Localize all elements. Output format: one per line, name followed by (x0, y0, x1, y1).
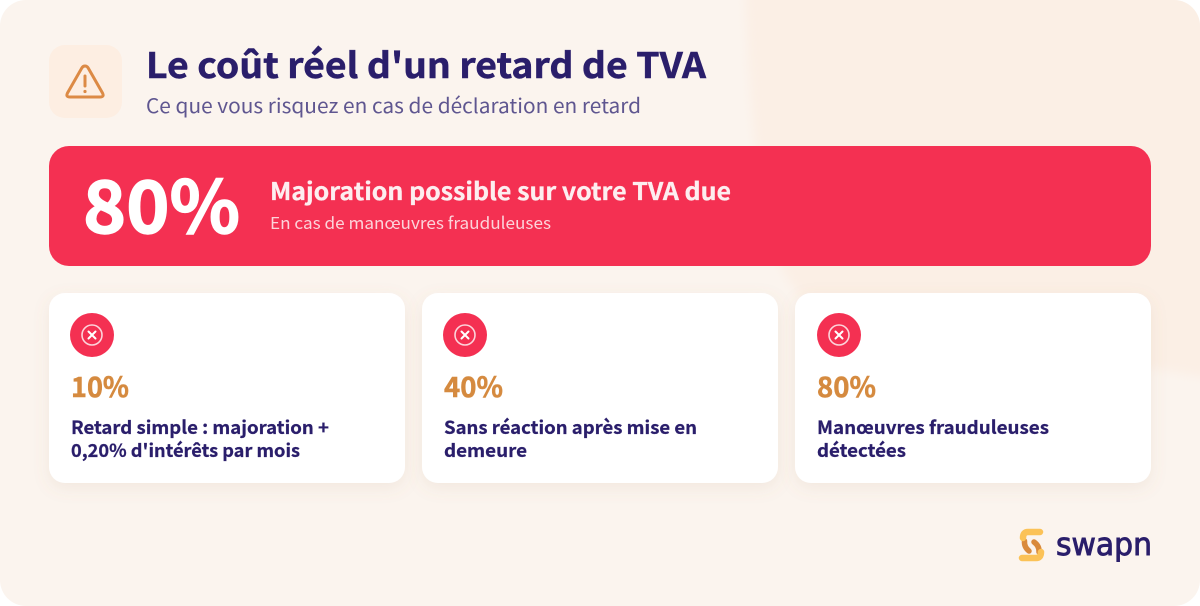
big number: 80% (83, 149, 240, 254)
percentage: 80% (817, 366, 876, 406)
icon: cross in circle (443, 313, 487, 357)
banner heading: Majoration possible sur votre TVA due (270, 172, 731, 207)
icon: cross in circle (70, 313, 114, 357)
description: demeure (444, 437, 527, 463)
icon: logo mark (1022, 532, 1041, 558)
icon: warning triangle (49, 45, 122, 118)
description: 0,20% d'intérêts par mois (71, 437, 300, 463)
panel: main red banner (49, 146, 1151, 266)
description: Retard simple : majoration + (71, 414, 329, 440)
panel: card 10% (49, 293, 405, 483)
description: Sans réaction après mise en (444, 414, 697, 440)
banner subtext: En cas de manœuvres frauduleuses (270, 210, 551, 234)
wordmark: swapn (1056, 527, 1152, 563)
logo: swapn (1022, 527, 1152, 563)
panel: card 80% (795, 293, 1151, 483)
percentage: 10% (71, 366, 129, 406)
subtitle: Ce que vous risquez en cas de déclaration en retard (146, 90, 641, 119)
description: détectées (817, 437, 906, 463)
percentage: 40% (444, 366, 503, 406)
icon: cross in circle (817, 313, 861, 357)
panel: card 40% (422, 293, 778, 483)
title: Le coût réel d'un retard de TVA (146, 38, 707, 89)
description: Manœuvres frauduleuses (817, 414, 1049, 440)
